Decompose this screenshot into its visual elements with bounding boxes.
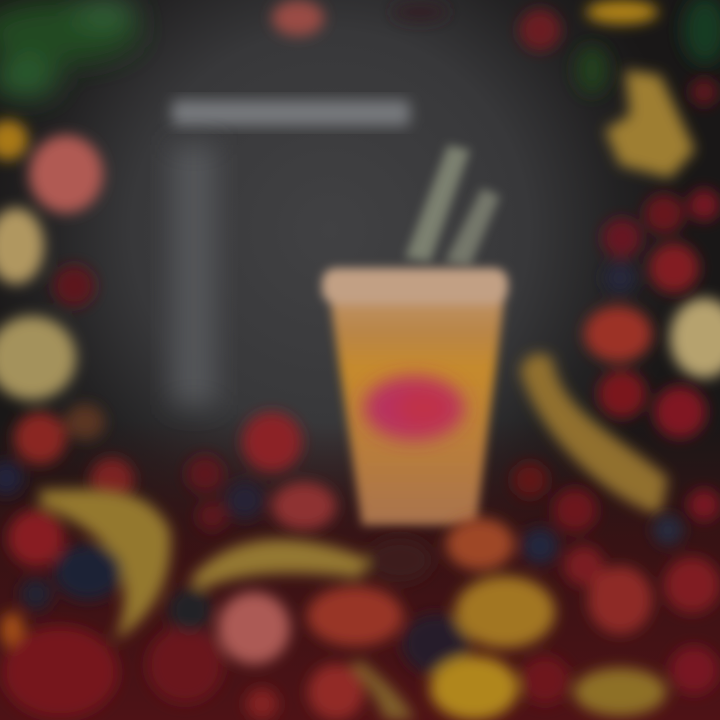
top fruit [272,0,658,51]
curved banana peel right [520,354,668,515]
smoothie cup [322,268,508,525]
straws [405,145,500,266]
bottom fruit pile [0,462,720,720]
heading: blurred title text bar [172,100,410,126]
right berries [584,78,720,521]
left fruit column [0,120,134,502]
icon: top left green leaves [0,0,140,98]
centre berries beside the cup [186,412,336,531]
right banana slices [605,70,720,378]
icon: top right leaves [576,0,720,94]
cup label [364,376,464,440]
text block: blurred vertical column [172,145,216,405]
